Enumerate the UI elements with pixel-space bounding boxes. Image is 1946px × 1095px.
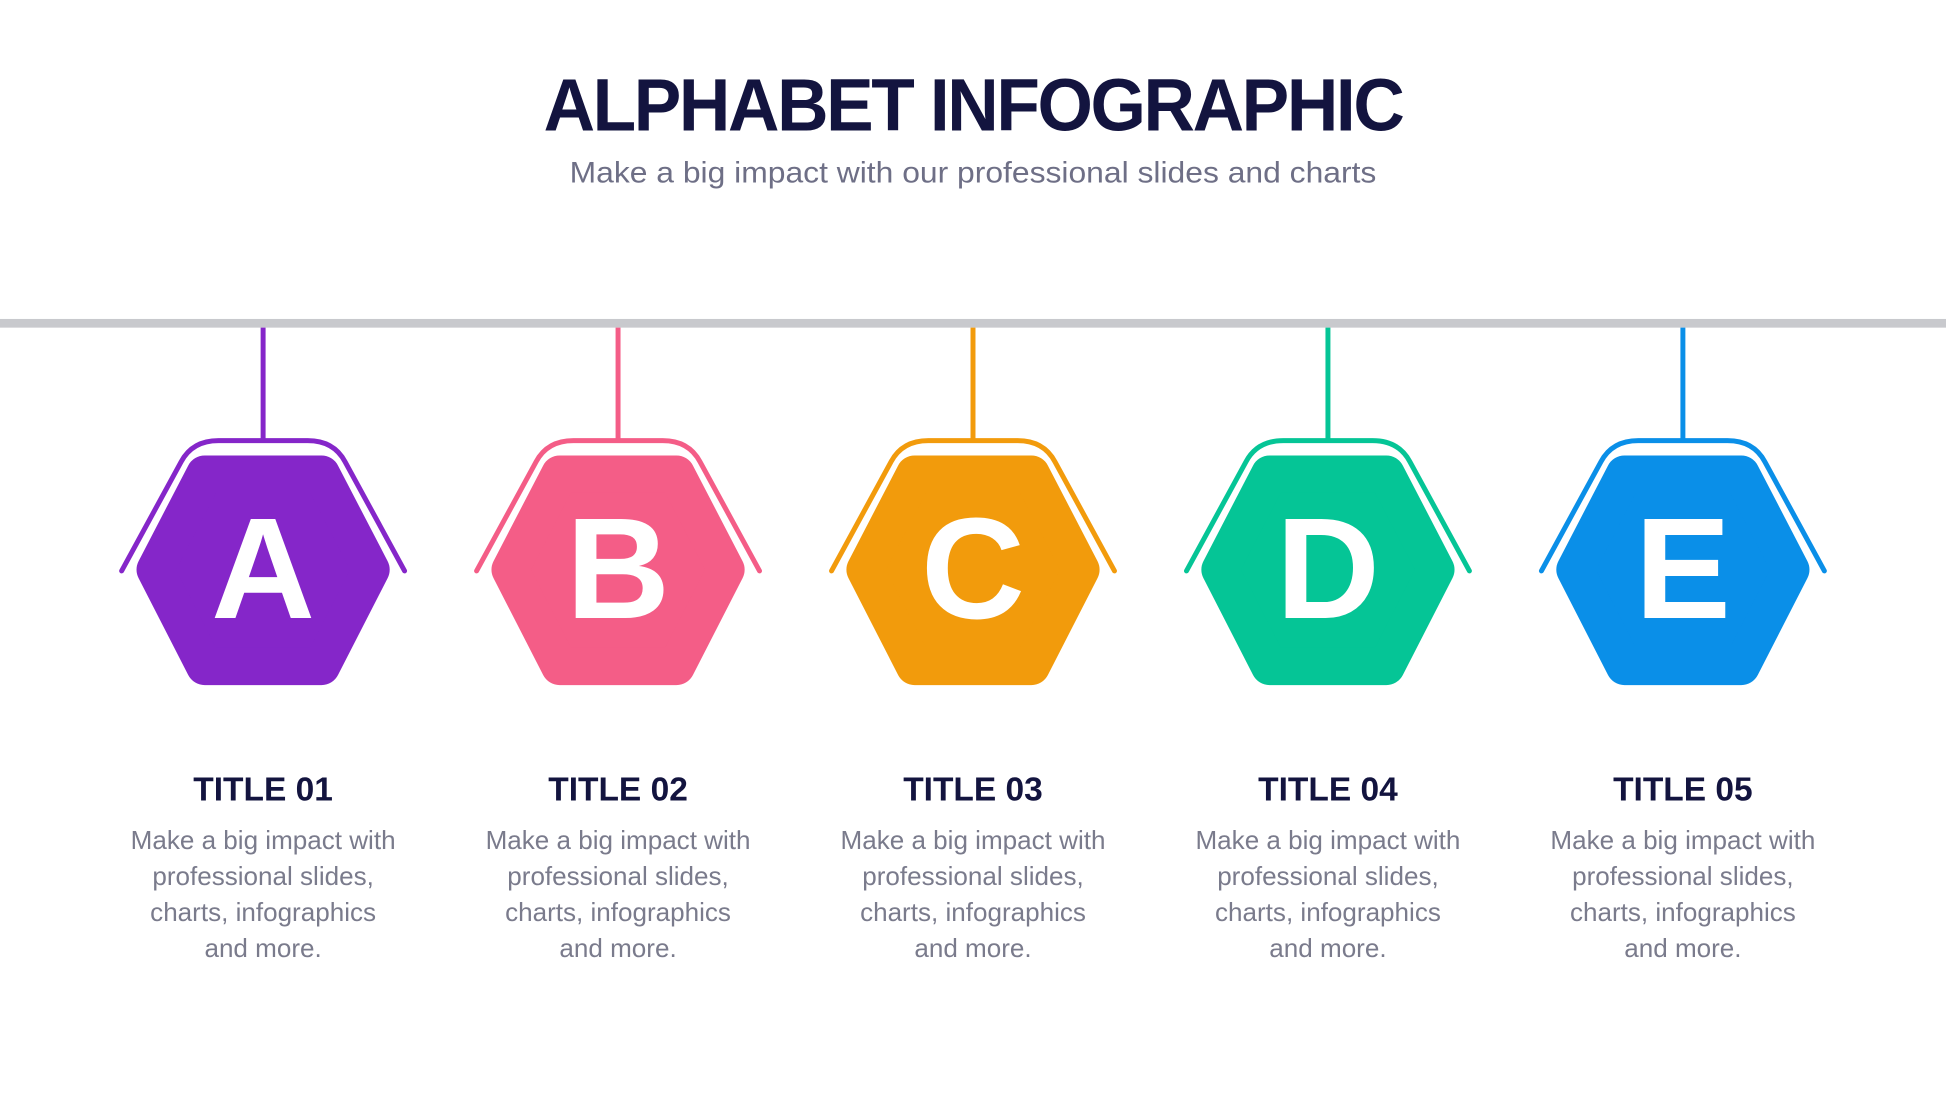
item D [1186,328,1469,963]
item E: professional slides, [1572,861,1794,891]
item A: professional slides, [152,861,374,891]
item D: D [1276,488,1380,649]
item E: charts, infographics [1570,897,1796,927]
item C: TITLE 03 [903,771,1043,808]
item D: Make a big impact with [1195,825,1460,855]
item B: Make a big impact with [486,825,751,855]
item A: A [211,488,315,649]
item C: and more. [914,933,1032,963]
item D: professional slides, [1217,861,1439,891]
item D: and more. [1269,933,1387,963]
item E: TITLE 05 [1613,771,1753,808]
item B [477,328,760,963]
item A [122,328,405,963]
subtitle: Make a big impact with our professional slides and charts [570,156,1376,189]
gray rail [0,319,1946,328]
item C: professional slides, [862,861,1084,891]
item C: charts, infographics [860,897,1086,927]
item D: charts, infographics [1215,897,1441,927]
item E [1541,328,1824,963]
title: ALPHABET INFOGRAPHIC [544,63,1403,146]
item B: professional slides, [507,861,729,891]
item E: Make a big impact with [1550,825,1815,855]
item E: E [1635,488,1731,649]
item C: C [921,488,1025,649]
item A: and more. [204,933,322,963]
item C [832,328,1114,963]
item A: charts, infographics [150,897,376,927]
item A: Make a big impact with [131,825,396,855]
item C: Make a big impact with [841,825,1105,855]
item B: and more. [559,933,677,963]
item B: charts, infographics [505,897,731,927]
item B: B [566,488,670,649]
item D: TITLE 04 [1258,771,1398,808]
item E: and more. [1624,933,1742,963]
item B: TITLE 02 [548,771,688,808]
item A: TITLE 01 [193,771,333,808]
